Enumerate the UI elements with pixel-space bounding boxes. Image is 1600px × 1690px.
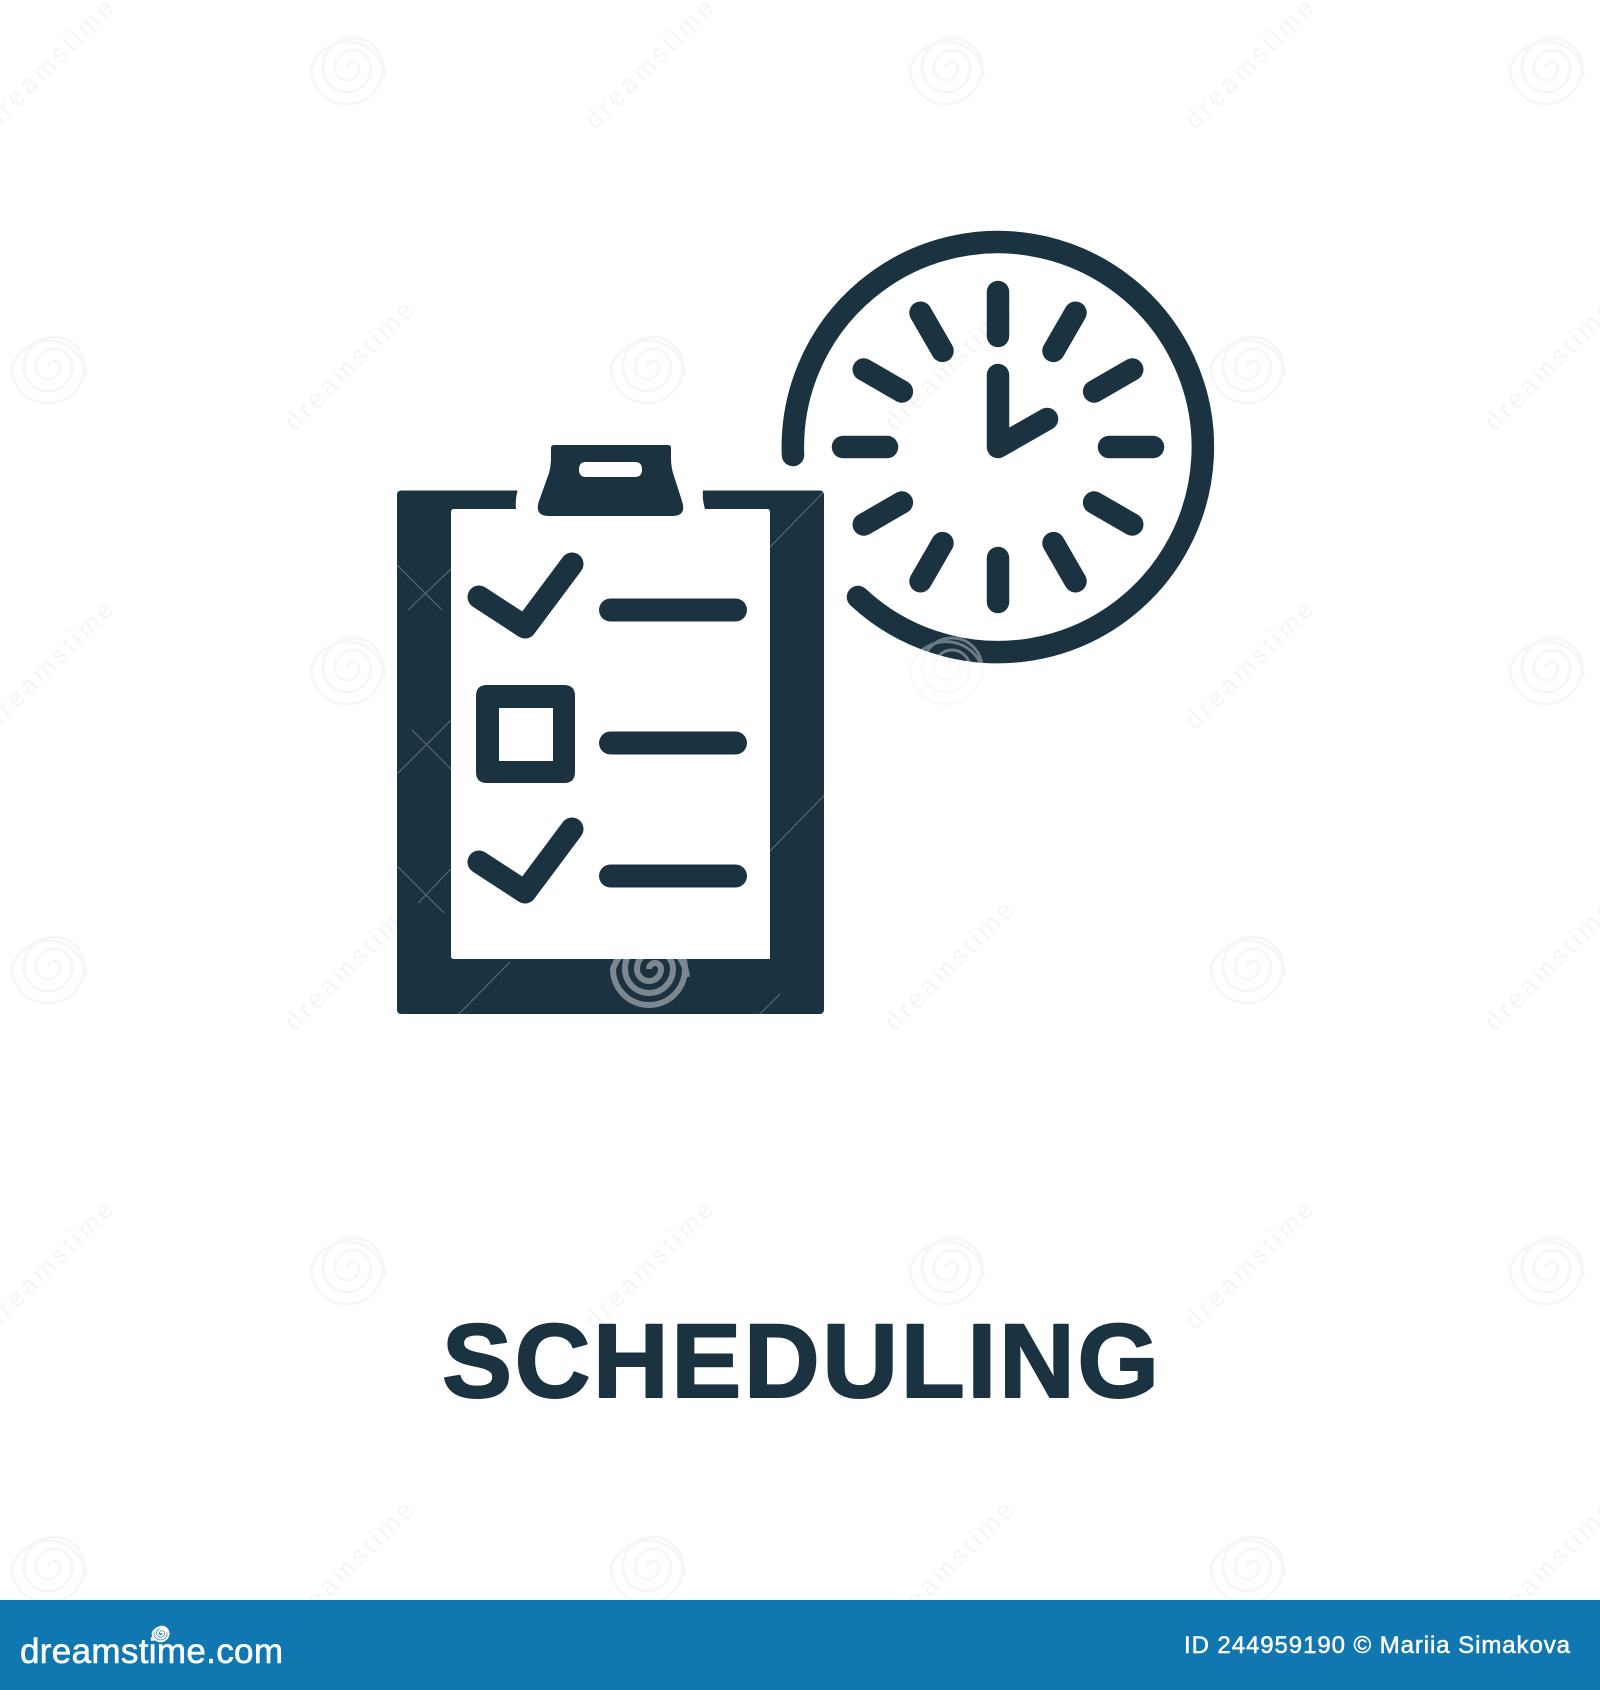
clock rim arc	[793, 242, 1203, 652]
text: dreamstime	[278, 895, 419, 1036]
clipboard paper	[451, 489, 770, 959]
clock hands	[998, 375, 1047, 447]
footer logo: dreamstime.com: dreamstime.com	[20, 1632, 283, 1671]
clock hour ticks	[843, 292, 1153, 602]
text: dreamstime	[278, 1495, 419, 1636]
footer image credit: ID 244959190 © Mariia Simakova	[1184, 1632, 1571, 1659]
checklist item 1: line	[599, 598, 747, 622]
clipboard clip	[538, 445, 683, 516]
checklist item 1: check mark	[479, 564, 572, 627]
text: dreamstime	[1178, 1194, 1319, 1335]
icon: clock	[793, 242, 1203, 652]
text: dreamstime	[578, 1194, 719, 1335]
text: dreamstime	[1178, 594, 1319, 735]
checklist item 3: line	[599, 864, 747, 888]
title: SCHEDULING	[442, 1303, 1159, 1420]
text: dreamstime	[278, 295, 419, 436]
footer band	[0, 1600, 1600, 1690]
clipboard board	[397, 490, 824, 1014]
checklist item 2: line	[599, 732, 747, 754]
text: dreamstime	[878, 295, 1019, 436]
checklist item 3: check mark	[479, 829, 572, 892]
text: dreamstime	[878, 895, 1019, 1036]
icon: clipboard with checklist	[397, 445, 824, 1014]
text: dreamstime	[878, 1495, 1019, 1636]
checklist item 2: empty checkbox	[476, 685, 575, 783]
icon: logo swirl	[153, 1627, 169, 1641]
text: dreamstime	[578, 594, 719, 735]
